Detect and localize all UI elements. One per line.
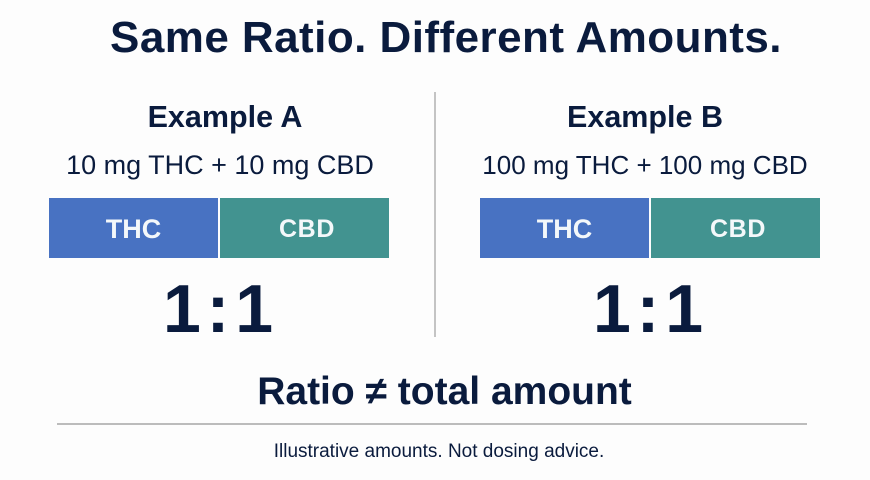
ratio bar: example A [49, 198, 389, 258]
title: Same Ratio. Different Amounts. [110, 13, 782, 62]
ratio: example B: 1 : 1 [593, 271, 703, 347]
amounts: example B: 100 mg THC + 100 mg CBD [482, 150, 808, 180]
heading: example B: Example B [567, 100, 723, 134]
CBD segment [220, 198, 389, 258]
panel: example A [49, 100, 389, 347]
CBD segment: CBD [710, 215, 766, 243]
THC segment [480, 198, 649, 258]
CBD segment [651, 198, 820, 258]
vertical divider [434, 92, 436, 337]
THC segment [49, 198, 218, 258]
THC segment: THC [106, 214, 161, 244]
THC segment: THC [537, 214, 592, 244]
takeaway: Ratio ≠ total amount [257, 370, 632, 413]
panel: example B [480, 100, 820, 347]
amounts: example A: 10 mg THC + 10 mg CBD [66, 150, 374, 180]
disclaimer: Illustrative amounts. Not dosing advice. [274, 441, 604, 462]
ratio bar: example B [480, 198, 820, 258]
ratio: example A: 1 : 1 [163, 271, 273, 347]
CBD segment: CBD [279, 215, 335, 243]
heading: example A: Example A [148, 100, 302, 134]
horizontal divider [57, 423, 807, 425]
